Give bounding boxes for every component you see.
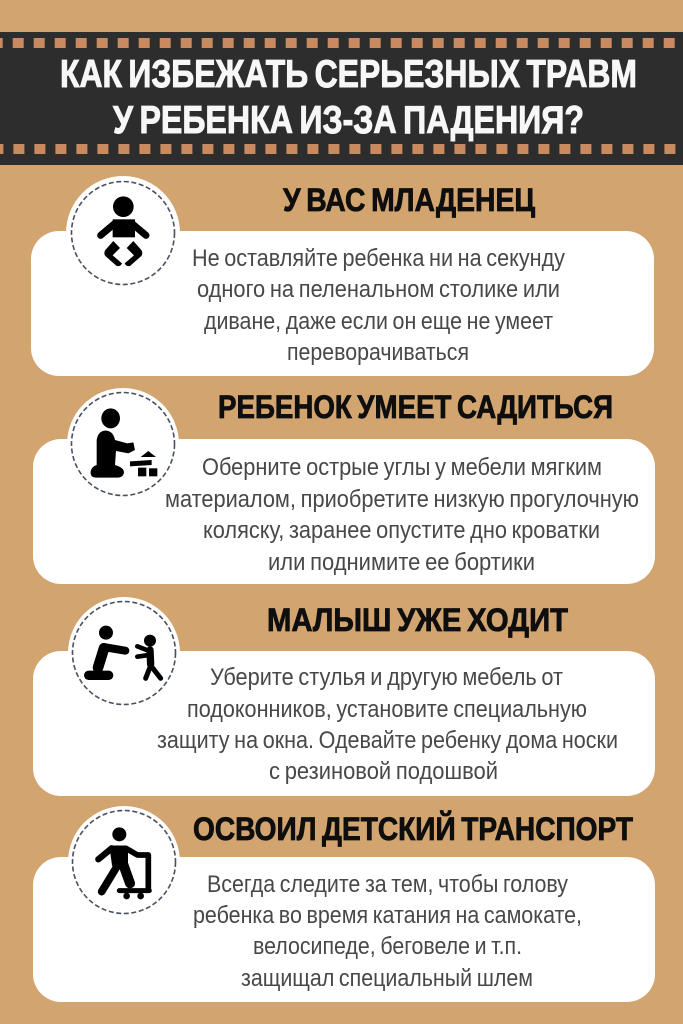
title: У РЕБЕНКА ИЗ-ЗА ПАДЕНИЯ? bbox=[113, 99, 584, 142]
panel: child can sit bbox=[33, 388, 655, 584]
heading: child can sit: РЕБЕНОК УМЕЕТ САДИТЬСЯ bbox=[218, 389, 613, 425]
text: transport advice bbox=[193, 871, 582, 992]
text: walking advice: с резиновой подошвой bbox=[269, 758, 498, 785]
text: walking advice: подоконников, установите специальную bbox=[187, 696, 587, 723]
text: transport advice: велосипеде, беговеле и т.п. bbox=[253, 933, 522, 960]
text: sitting advice: Оберните острые углы у мебели мягким bbox=[202, 454, 602, 481]
text: infant advice: Не оставляйте ребенка ни на секунду bbox=[192, 245, 565, 272]
text: sitting advice bbox=[165, 454, 639, 576]
heading: child rides transport: ОСВОИЛ ДЕТСКИЙ ТРАНСПОРТ bbox=[193, 811, 633, 847]
text: walking advice: защиту на окна. Одевайте ребенку дома носки bbox=[157, 727, 618, 754]
icon: child on scooter bbox=[98, 827, 149, 899]
text: infant advice: одного на пеленальном столике или bbox=[197, 276, 560, 303]
text: transport advice: защищал специальный шлем bbox=[241, 965, 533, 992]
text: sitting advice: материалом, приобретите низкую прогулочную bbox=[165, 486, 639, 513]
panel: infant bbox=[31, 176, 654, 376]
text: transport advice: Всегда следите за тем, чтобы голову bbox=[207, 871, 568, 898]
text: sitting advice: коляску, заранее опустите дно кроватки bbox=[203, 517, 600, 544]
title bbox=[60, 53, 637, 142]
text: walking advice bbox=[157, 664, 618, 785]
text: infant advice: диване, даже если он еще не умеет bbox=[204, 308, 553, 335]
text: transport advice: ребенка во время катания на самокате, bbox=[193, 902, 582, 929]
text: sitting advice: или поднимите ее бортики bbox=[268, 549, 535, 576]
panel: child rides transport bbox=[33, 806, 655, 1002]
text: infant advice bbox=[192, 245, 565, 366]
text: infant advice: переворачиваться bbox=[287, 339, 469, 366]
panel: toddler walks bbox=[33, 597, 655, 796]
heading: toddler walks: МАЛЫШ УЖЕ ХОДИТ bbox=[267, 602, 568, 638]
icon: baby bbox=[101, 196, 146, 266]
icon: sitting child with blocks bbox=[91, 408, 157, 478]
text: walking advice: Уберите стулья и другую мебель от bbox=[210, 664, 563, 691]
heading: infant: У ВАС МЛАДЕНЕЦ bbox=[283, 182, 536, 218]
icon: adult and walking child bbox=[89, 626, 161, 678]
title banner: film strip bbox=[0, 32, 683, 165]
